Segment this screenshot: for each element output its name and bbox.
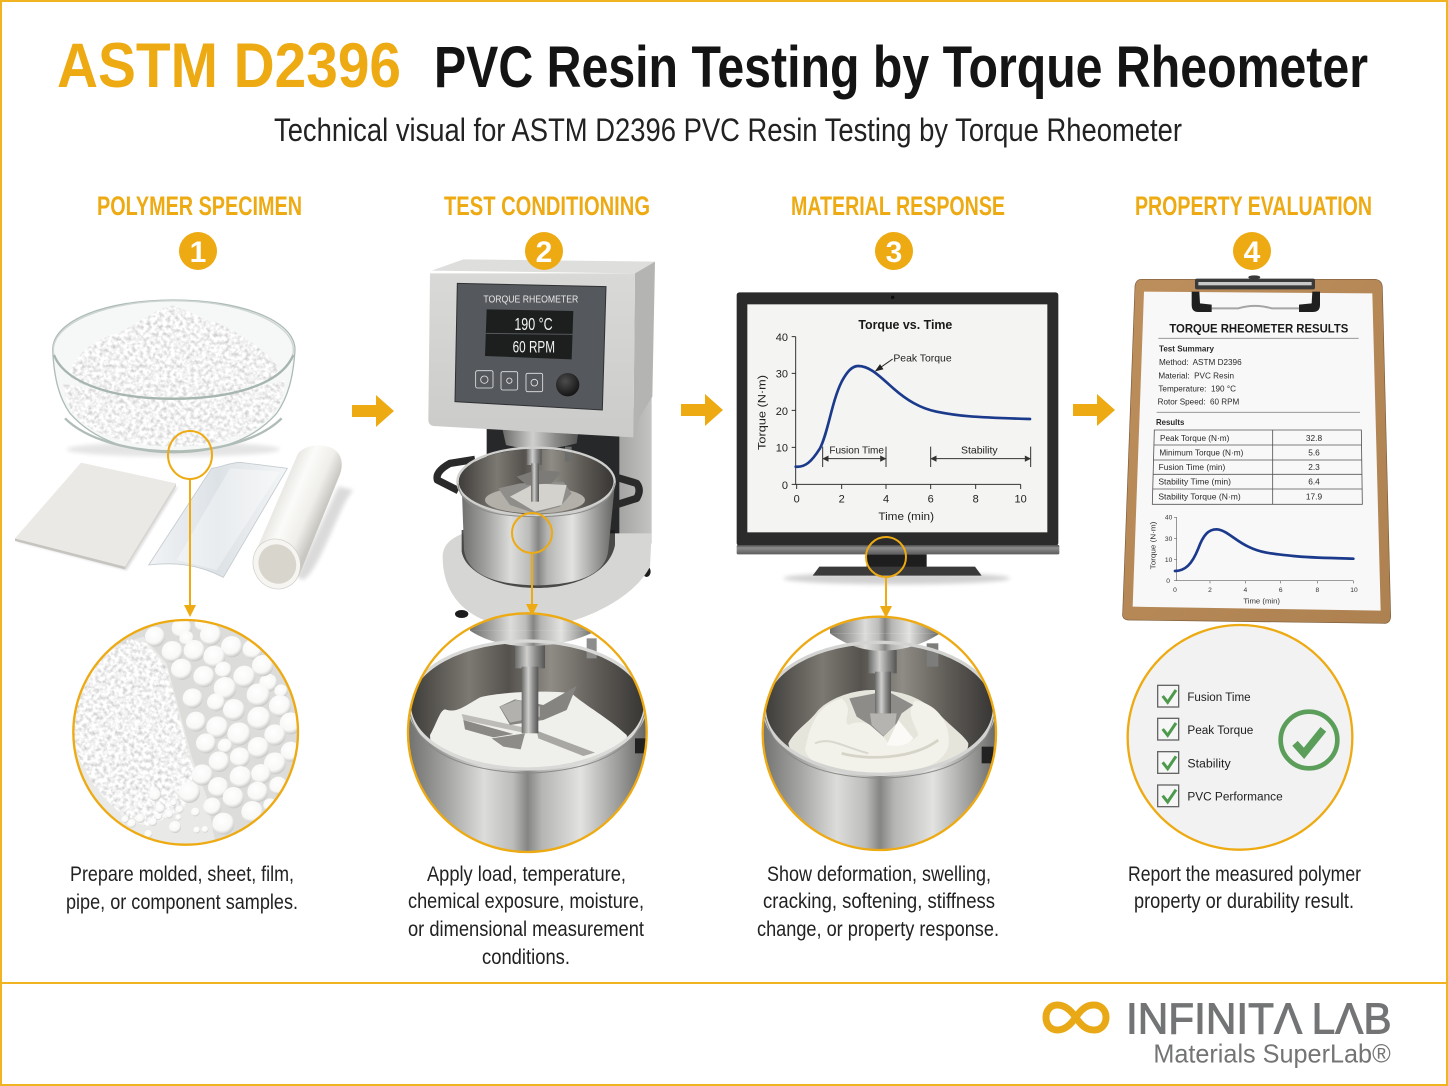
footer divider bbox=[1, 982, 1447, 984]
callout ring: pot bbox=[512, 513, 552, 553]
magnified view: softened resin in bowl bbox=[760, 613, 1000, 853]
chart: torque vs time: 0 bbox=[782, 480, 788, 492]
magnified view: mixer with resin in bowl bbox=[407, 610, 650, 857]
mini chart: 0 bbox=[1166, 578, 1170, 585]
results table: 5.6 bbox=[1308, 447, 1320, 457]
results table: 2.3 bbox=[1308, 462, 1320, 472]
test summary: Temperature: 190 °C bbox=[1158, 383, 1236, 393]
rotor blades bbox=[498, 470, 572, 513]
torque rheometer machine bbox=[428, 259, 655, 628]
mini chart: 4 bbox=[1243, 587, 1247, 594]
chart: torque vs time: Torque (N·m) bbox=[757, 375, 769, 450]
test summary: Method: ASTM D2396 bbox=[1159, 357, 1242, 367]
monitor with torque chart bbox=[737, 292, 1059, 584]
chart: torque vs time: Torque vs. Time bbox=[858, 318, 952, 332]
callout ring: monitor bbox=[866, 537, 906, 577]
results heading: TORQUE RHEOMETER RESULTS bbox=[1169, 322, 1348, 336]
arrow: step 1 to step 2 bbox=[352, 395, 394, 427]
step 4 description: Report the measured polymer bbox=[1128, 863, 1361, 886]
chart: torque vs time: Stability bbox=[961, 445, 999, 456]
pot handles bbox=[437, 459, 639, 508]
arrow: pot to magnified view bbox=[526, 553, 538, 616]
step 2 description: or dimensional measurement bbox=[408, 918, 644, 941]
step 3 description bbox=[757, 863, 999, 941]
test summary: Test Summary bbox=[1159, 344, 1214, 354]
step 2 description: chemical exposure, moisture, bbox=[408, 890, 644, 913]
evaluation checklist circle bbox=[1128, 625, 1352, 850]
heading: polymer specimen: POLYMER SPECIMEN bbox=[97, 191, 302, 221]
mini chart: 0 bbox=[1173, 587, 1177, 594]
badge: step 4 bbox=[1233, 232, 1271, 270]
arrow: specimen to magnified view bbox=[184, 479, 196, 617]
badge: step 3 bbox=[875, 232, 913, 270]
mini chart: 10 bbox=[1165, 557, 1173, 564]
icon: large approval check bbox=[1281, 712, 1337, 768]
control panel: 190 °C bbox=[514, 314, 553, 334]
chart: torque vs time: 0 bbox=[794, 493, 800, 505]
results table: Results bbox=[1156, 417, 1185, 427]
badge: step 4: 4 bbox=[1244, 236, 1261, 269]
mini chart bbox=[1150, 515, 1358, 605]
clipboard clip bbox=[1192, 275, 1320, 312]
badge: step 2 bbox=[525, 232, 563, 270]
chart: torque vs time: 10 bbox=[776, 443, 788, 455]
chart: torque vs time: 2 bbox=[839, 493, 845, 505]
step 3 description: cracking, softening, stiffness bbox=[763, 890, 995, 913]
step 3 description: Show deformation, swelling, bbox=[767, 863, 991, 886]
logo: Infinita Lab: Materials SuperLab® bbox=[1153, 1038, 1391, 1068]
results table: Minimum Torque (N·m) bbox=[1159, 447, 1244, 457]
test summary bbox=[1158, 344, 1242, 406]
results table: Stability Torque (N·m) bbox=[1158, 492, 1241, 502]
step 1 description: Prepare molded, sheet, film, bbox=[70, 863, 294, 886]
control panel: 60 RPM bbox=[513, 338, 555, 357]
step 3 description: change, or property response. bbox=[757, 918, 999, 941]
results table: Stability Time (min) bbox=[1158, 477, 1231, 487]
callout ring: specimen bbox=[168, 431, 212, 479]
checklist items: Peak Torque bbox=[1187, 723, 1253, 737]
mini chart: Torque (N·m) bbox=[1150, 522, 1157, 569]
mini chart: 30 bbox=[1165, 536, 1173, 543]
title bbox=[57, 31, 1368, 101]
chart: torque vs time: Time (min) bbox=[878, 511, 934, 523]
results table: Fusion Time (min) bbox=[1159, 462, 1226, 472]
step 2 description: Apply load, temperature, bbox=[427, 863, 626, 886]
subtitle: Technical visual for ASTM D2396 PVC Resin Testing by Torque Rheometer bbox=[274, 112, 1182, 148]
checklist items: PVC Performance bbox=[1187, 790, 1283, 804]
results table bbox=[1152, 417, 1362, 504]
checklist items: Stability bbox=[1187, 757, 1231, 771]
logo: Infinita Lab: INFINITΛ LΛB bbox=[1126, 995, 1392, 1043]
badge: step 1 bbox=[179, 232, 217, 270]
title: ASTM D2396 bbox=[57, 31, 401, 101]
badge: step 3: 3 bbox=[886, 236, 902, 269]
chart: torque vs time: 40 bbox=[776, 332, 788, 344]
step 1 description: pipe, or component samples. bbox=[66, 891, 298, 914]
chart: torque vs time bbox=[757, 318, 1031, 523]
checklist items bbox=[1158, 685, 1283, 807]
clipboard results sheet bbox=[1123, 275, 1391, 623]
mini chart: Time (min) bbox=[1243, 596, 1280, 605]
test summary: Rotor Speed: 60 RPM bbox=[1158, 396, 1239, 406]
checklist items: Fusion Time bbox=[1187, 690, 1251, 704]
chart: torque vs time: 6 bbox=[928, 493, 934, 505]
mini chart: 6 bbox=[1279, 587, 1283, 594]
results table: 17.9 bbox=[1306, 492, 1322, 502]
step 2 description bbox=[408, 863, 644, 969]
magnified view: resin powder and beads bbox=[70, 615, 303, 850]
chart: torque vs time: 4 bbox=[883, 493, 889, 505]
badge: step 1: 1 bbox=[190, 236, 206, 269]
mini chart: 2 bbox=[1208, 587, 1212, 594]
mini chart: 10 bbox=[1350, 587, 1358, 594]
step 1 specimens photo bbox=[15, 300, 353, 597]
mini chart: 8 bbox=[1315, 587, 1319, 594]
mini chart: 40 bbox=[1165, 515, 1173, 522]
step 4 description bbox=[1128, 863, 1361, 913]
chart: torque vs time: Peak Torque bbox=[893, 354, 952, 365]
results table: Peak Torque (N·m) bbox=[1160, 433, 1230, 443]
chart: torque vs time: Fusion Time bbox=[829, 445, 884, 456]
icon: infinity symbol bbox=[1046, 1005, 1106, 1030]
control panel: TORQUE RHEOMETER bbox=[483, 295, 578, 306]
step 1 description bbox=[66, 863, 298, 914]
heading: material response: MATERIAL RESPONSE bbox=[791, 191, 1005, 221]
chart: torque vs time: 20 bbox=[776, 406, 788, 418]
results table: 32.8 bbox=[1306, 433, 1322, 443]
heading: test conditioning: TEST CONDITIONING bbox=[444, 191, 650, 221]
chart: torque vs time: 8 bbox=[973, 493, 979, 505]
logo: Infinita Lab bbox=[1046, 995, 1392, 1068]
chart: torque vs time: 30 bbox=[776, 369, 788, 381]
instrument head bbox=[428, 259, 655, 437]
step 2 description: conditions. bbox=[482, 946, 570, 969]
arrow: step 2 to step 3 bbox=[681, 394, 723, 426]
badge: step 2: 2 bbox=[536, 236, 552, 269]
chart: torque vs time: 10 bbox=[1015, 493, 1027, 505]
control panel bbox=[455, 283, 606, 410]
step 4 description: property or durability result. bbox=[1134, 890, 1354, 913]
test summary: Material: PVC Resin bbox=[1158, 370, 1234, 380]
results table: 6.4 bbox=[1308, 477, 1320, 487]
arrow: step 3 to step 4 bbox=[1073, 394, 1115, 426]
arrow: monitor to magnified view bbox=[880, 578, 892, 618]
